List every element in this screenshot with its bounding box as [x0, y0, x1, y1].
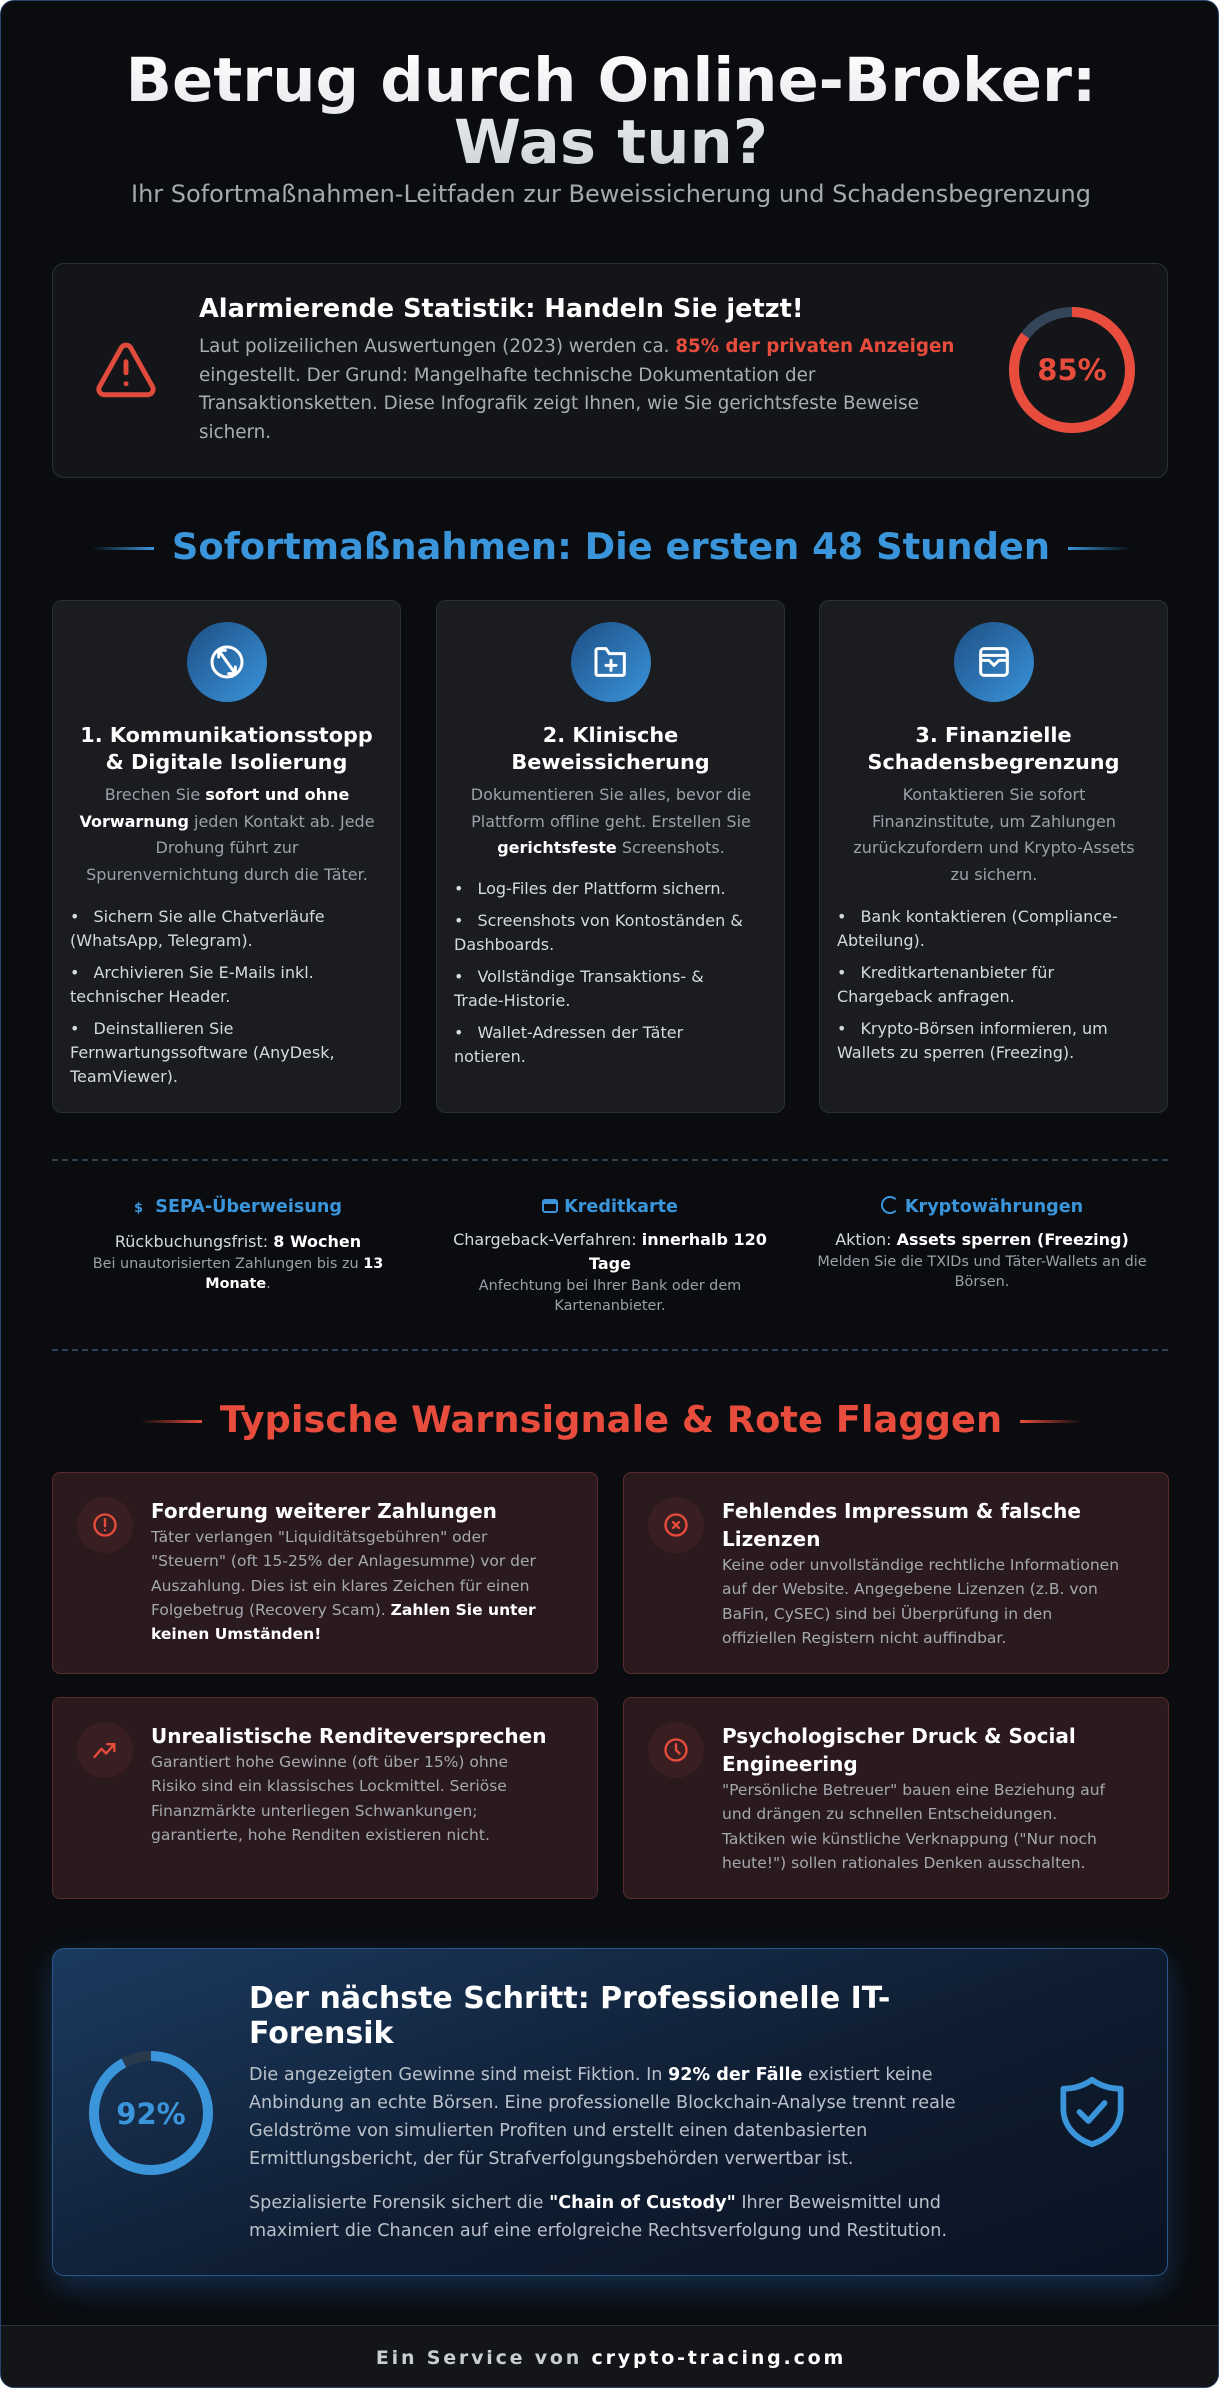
- icon: clock: [648, 1722, 704, 1778]
- icon: warning triangle: [96, 342, 156, 398]
- icon: alert circle: [77, 1497, 133, 1553]
- icon: shield check: [1060, 2076, 1124, 2148]
- footer: Ein Service von crypto-tracing.com: [376, 2347, 846, 2369]
- panel: Krypto: [817, 1196, 1147, 1290]
- panel: card 3: Kontaktieren Sie sofort Finanzinstitute, um Zahlungen zurückzufordern und Krypto-Assets zu sichern.: [853, 785, 1135, 884]
- panel: Krypto: Kryptowährungen: [905, 1197, 1083, 1217]
- panel: card 1: 1. Kommunikationsstopp & Digitale Isolierung: [80, 723, 373, 774]
- panel: card 1: Brechen Sie sofort und ohne Vorwarnung jeden Kontakt ab. Jede Drohung führt zur Spurenvernichtung durch die Täter.: [79, 785, 375, 884]
- panel: warn 3: [52, 1697, 598, 1899]
- panel: SEPA: $ SEPA-Überweisung: [134, 1197, 342, 1217]
- panel: SEPA: [93, 1196, 383, 1292]
- panel: warn 3: Garantiert hohe Gewinne (oft über 15%) ohne Risiko sind ein klassisches Lockmittel. Seriöse Finanzmärkte unterliegen Schwankungen; garantierte, hohe Renditen existieren nicht.: [151, 1753, 508, 1844]
- panel: Kreditkarte: Anfechtung bei Ihrer Bank oder dem Kartenanbieter.: [479, 1278, 741, 1314]
- list: [70, 907, 335, 1086]
- list: Log-Files der Plattform sichern.: [477, 879, 726, 898]
- panel: warn 4: "Persönliche Betreuer" bauen eine Beziehung auf und drängen zu schnellen Entscheidungen. Taktiken wie künstliche Verknappung ("Nur noch heute!") sollen rationales Denken ausschalten.: [722, 1781, 1105, 1872]
- icon: x circle: [648, 1497, 704, 1553]
- list: Wallet-Adressen der Täter notieren.: [454, 1023, 683, 1066]
- title: Was tun?: [454, 108, 768, 178]
- title: [1, 50, 1220, 174]
- list: Kreditkartenanbieter für Chargeback anfragen.: [837, 963, 1054, 1006]
- panel: card 3: 3. Finanzielle Schadensbegrenzung: [868, 723, 1119, 774]
- alert text: Laut polizeilichen Auswertungen (2023) werden ca. 85% der privaten Anzeigen eingestellt. Der Grund: Mangelhafte technische Dokumentation der Transaktionsketten. Diese Infografik zeigt Ihnen, wie Sie gerichtsfeste Beweise sichern.: [199, 336, 954, 442]
- list: Vollständige Transaktions- & Trade-Historie.: [454, 967, 704, 1010]
- list: Deinstallieren Sie Fernwartungssoftware (AnyDesk, TeamViewer).: [70, 1019, 335, 1086]
- list: Sichern Sie alle Chatverläufe (WhatsApp, Telegram).: [70, 907, 325, 950]
- panel: SEPA: Rückbuchungsfrist: 8 Wochen: [115, 1232, 361, 1251]
- icon: folder plus: [571, 622, 651, 702]
- title: Betrug durch Online-Broker:: [126, 46, 1096, 116]
- panel: Kreditkarte: Kreditkarte: [564, 1197, 678, 1217]
- chart: 85% ring: 85%: [1037, 353, 1107, 387]
- alert heading: Alarmierende Statistik: Handeln Sie jetzt!: [199, 294, 804, 324]
- chart: 92% ring: 92%: [116, 2097, 186, 2131]
- footer: [1, 2325, 1220, 2389]
- panel: Krypto: Aktion: Assets sperren (Freezing): [835, 1230, 1129, 1249]
- panel: warn 2: Fehlendes Impressum & falsche Lizenzen: [722, 1499, 1081, 1551]
- panel: card 2: Dokumentieren Sie alles, bevor die Plattform offline geht. Erstellen Sie gerichtsfeste Screenshots.: [471, 785, 751, 857]
- chart: 92% ring: [89, 2051, 213, 2175]
- icon: wallet: [954, 622, 1034, 702]
- panel: warn 2: Keine oder unvollständige rechtliche Informationen auf der Website. Angegebene Lizenzen (z.B. von BaFin, CySEC) sind bei Überprüfung in den offiziellen Registern nicht auffindbar.: [722, 1556, 1119, 1647]
- heading: Warnsignale: Typische Warnsignale & Rote Flaggen: [220, 1398, 1002, 1441]
- heading: Sofortmaßnahmen: Sofortmaßnahmen: Die ersten 48 Stunden: [172, 525, 1050, 568]
- panel: card 1: [52, 600, 401, 1113]
- panel: Kreditkarte: Chargeback-Verfahren: innerhalb 120 Tage: [453, 1230, 767, 1273]
- panel: alarm statistic: [52, 263, 1168, 478]
- panel: warn 1: Forderung weiterer Zahlungen: [151, 1499, 497, 1523]
- panel: warn 2: [623, 1472, 1169, 1674]
- list: Krypto-Börsen informieren, um Wallets zu sperren (Freezing).: [837, 1019, 1108, 1062]
- list: [454, 879, 743, 1066]
- panel: warn 4: [623, 1697, 1169, 1899]
- forensics text: Spezialisierte Forensik sichert die "Chain of Custody" Ihrer Beweismittel und maximiert die Chancen auf eine erfolgreiche Rechtsverfolgung und Restitution.: [249, 2193, 947, 2241]
- forensics text: Die angezeigten Gewinne sind meist Fiktion. In 92% der Fälle existiert keine Anbindung an echte Börsen. Eine professionelle Blockchain-Analyse trennt reale Geldströme von simulierten Profiten und erstellt einen datenbasierten Ermittlungsbericht, der für Strafverfolgungsbehörden verwertbar ist.: [249, 2065, 956, 2169]
- list: Screenshots von Kontoständen & Dashboards.: [454, 911, 743, 954]
- icon: trending up: [77, 1722, 133, 1778]
- list: Bank kontaktieren (Compliance-Abteilung).: [837, 907, 1118, 950]
- panel: Kreditkarte: [453, 1197, 767, 1314]
- panel: Krypto: Melden Sie die TXIDs und Täter-Wallets an die Börsen.: [817, 1254, 1147, 1290]
- subtitle: Ihr Sofortmaßnahmen-Leitfaden zur Beweissicherung und Schadensbegrenzung: [131, 180, 1091, 208]
- icon: communication stop: [187, 622, 267, 702]
- panel: warn 1: Täter verlangen "Liquiditätsgebühren" oder "Steuern" (oft 15-25% der Anlagesumme) vor der Auszahlung. Dies ist ein klares Zeichen für einen Folgebetrug (Recovery Scam). Zahlen Sie unter keinen Umständen!: [151, 1528, 536, 1643]
- panel: warn 3: Unrealistische Renditeversprechen: [151, 1724, 546, 1748]
- panel: card 2: 2. Klinische Beweissicherung: [511, 723, 710, 774]
- panel: card 2: [436, 600, 785, 1113]
- panel: warn 1: [52, 1472, 598, 1674]
- chart: 85% ring: [1009, 307, 1135, 433]
- panel: SEPA: Bei unautorisierten Zahlungen bis zu 13 Monate.: [93, 1256, 383, 1292]
- forensics text: [249, 2065, 956, 2241]
- forensics heading: Der nächste Schritt: Professionelle IT-Forensik: [249, 1981, 890, 2051]
- list: [837, 907, 1118, 1062]
- list: Archivieren Sie E-Mails inkl. technischer Header.: [70, 963, 314, 1006]
- panel: card 3: [819, 600, 1168, 1113]
- panel: warn 4: Psychologischer Druck & Social Engineering: [722, 1724, 1076, 1776]
- panel: forensics: [52, 1948, 1168, 2276]
